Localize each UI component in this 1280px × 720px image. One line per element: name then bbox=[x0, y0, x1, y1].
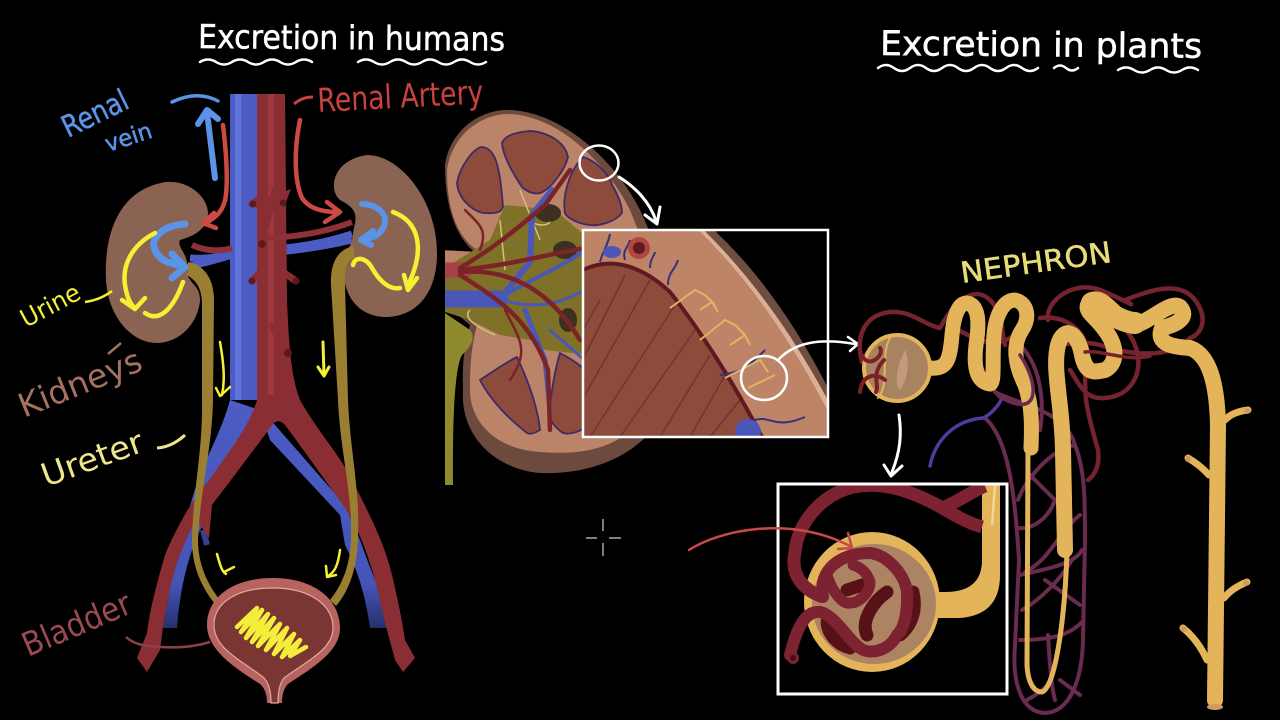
title: excretion in plants: Excretion in plants bbox=[880, 24, 1202, 67]
label: bladder: Bladder bbox=[16, 583, 137, 664]
ureters bbox=[187, 246, 358, 606]
arrows: blue renal vein flow bbox=[154, 96, 385, 278]
blood vessels: peritubular capillaries bbox=[985, 345, 1085, 713]
label: urine: Urine bbox=[15, 278, 85, 333]
artery: aorta with iliac branches bbox=[137, 94, 415, 672]
label: ureter: Ureter bbox=[36, 422, 149, 495]
arrow: nephron to glomerulus zoom bbox=[884, 415, 902, 476]
icon: zoom circle on nephron bbox=[741, 356, 787, 400]
renal artery branches bbox=[445, 170, 585, 430]
urine scribble bbox=[237, 608, 306, 657]
collecting duct and tubule bbox=[930, 299, 1248, 700]
label: renal vein: Renal bbox=[56, 83, 134, 145]
kidney: right bbox=[334, 155, 437, 317]
title: excretion in humans: Excretion in humans bbox=[198, 17, 505, 59]
renal pelvis bbox=[445, 205, 590, 355]
panel: zoomed cortex box bbox=[583, 230, 828, 445]
renal tubule bbox=[938, 486, 1000, 618]
blood vessels: afferent and efferent bbox=[860, 287, 1203, 480]
bladder bbox=[207, 578, 340, 703]
label: kidneys: Kidneys bbox=[12, 341, 148, 425]
glomerulus bbox=[860, 335, 930, 401]
arrows: yellow urine flow bbox=[122, 212, 418, 577]
arrow: to nephron bbox=[778, 337, 858, 360]
capillary tuft bbox=[790, 553, 914, 655]
blood vessels: across tubule bbox=[1085, 352, 1150, 358]
blood vessel: vein segment bbox=[930, 397, 1002, 466]
panel: glomerulus inset bbox=[778, 484, 1007, 694]
bowman capsule bbox=[804, 532, 940, 672]
ureter section bbox=[445, 313, 473, 485]
panel: kidney cross-section bbox=[445, 110, 648, 485]
icon: zoom circle on kidney cortex bbox=[580, 146, 618, 180]
panel: nephron diagram bbox=[860, 287, 1250, 713]
renal veins bbox=[190, 252, 232, 266]
duct ends bbox=[1181, 408, 1250, 710]
kidney: left bbox=[106, 182, 208, 343]
kidney outer capsule bbox=[445, 110, 648, 474]
arrows: red renal artery flow bbox=[203, 120, 340, 228]
arrow: to zoomed cortex bbox=[619, 177, 660, 224]
nephron details bbox=[670, 290, 775, 388]
label: renal artery: Renal Artery bbox=[316, 72, 484, 120]
vein: vena cava with iliac branches bbox=[163, 94, 388, 628]
label: nephron: NEPHRON bbox=[958, 235, 1113, 290]
panel: human urinary system bbox=[106, 94, 437, 703]
medulla bbox=[583, 262, 762, 437]
pyramids bbox=[457, 131, 622, 434]
label: bladder bbox=[16, 583, 210, 664]
icon: cursor crosshair bbox=[586, 519, 621, 556]
label: renal vein: vein bbox=[102, 118, 156, 158]
renal vein branches bbox=[445, 190, 590, 410]
arrow: red flow into glomerulus bbox=[689, 528, 852, 550]
efferent vessels bbox=[794, 485, 985, 597]
